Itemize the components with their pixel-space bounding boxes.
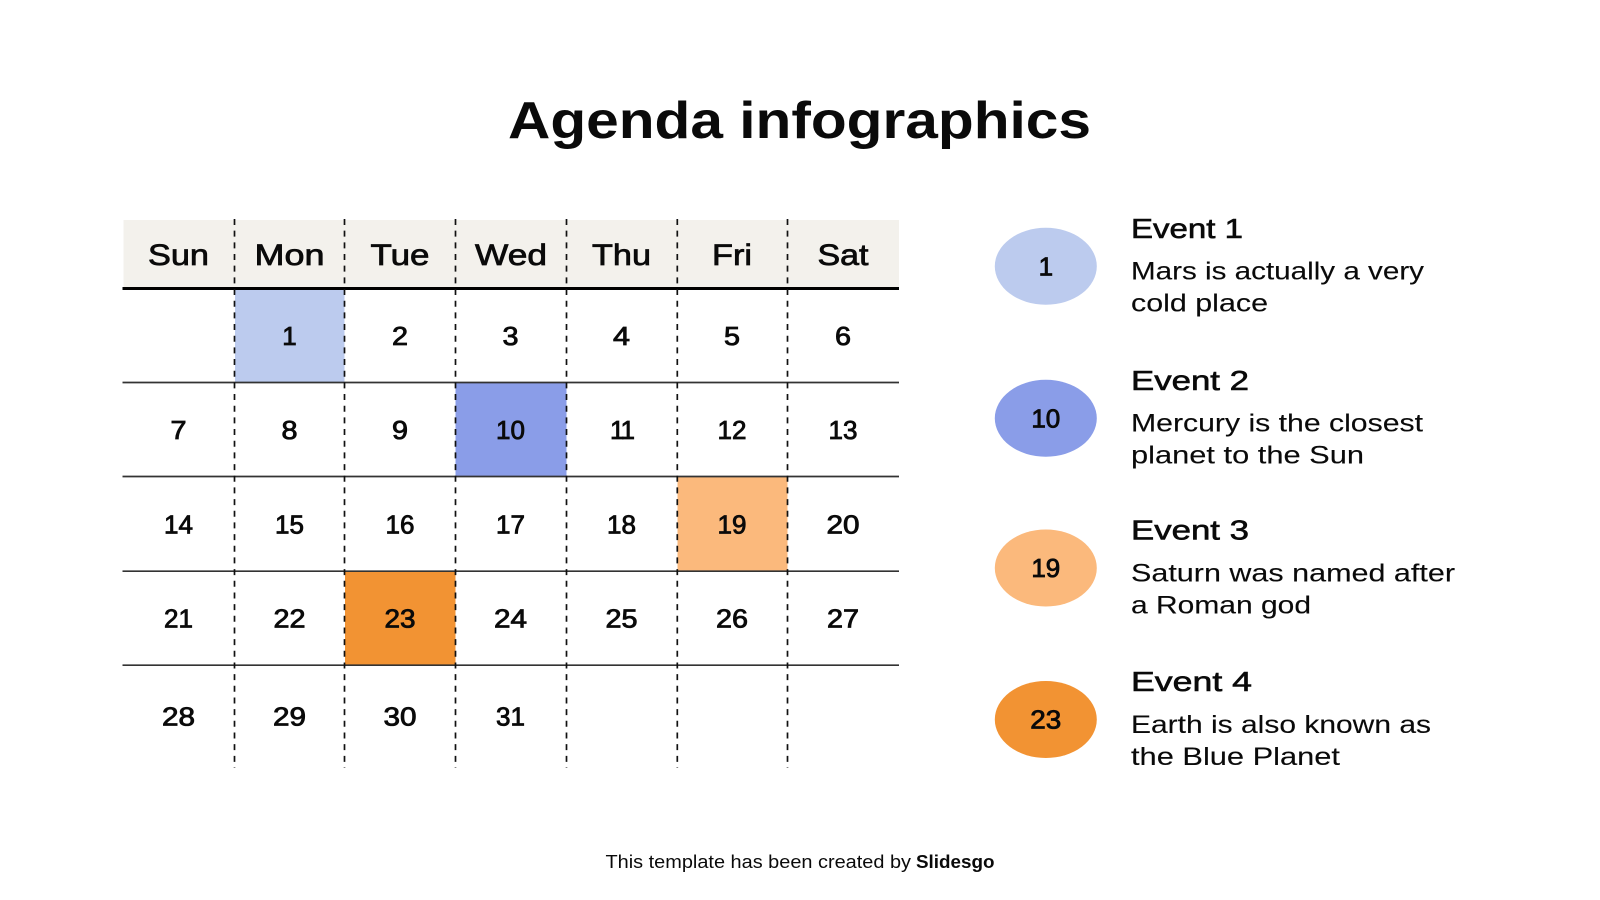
event 3 description bbox=[1131, 559, 1455, 619]
day numbers: 13 bbox=[829, 415, 857, 445]
panel: calendar bbox=[122, 219, 899, 768]
day numbers: 22 bbox=[274, 604, 306, 634]
badge: 1 bbox=[995, 228, 1097, 305]
badge: 23 bbox=[995, 681, 1097, 758]
day numbers: 30 bbox=[384, 702, 416, 732]
day numbers: 5 bbox=[724, 321, 740, 351]
event 2 description bbox=[1131, 410, 1423, 470]
day numbers: 3 bbox=[502, 321, 518, 351]
badge number 19: 19 bbox=[1031, 553, 1060, 583]
day numbers: 7 bbox=[170, 415, 186, 445]
event 1 description: Mars is actually a very bbox=[1131, 258, 1425, 286]
title: Agenda infographics bbox=[508, 92, 1091, 150]
weekday labels: Sun bbox=[148, 239, 209, 272]
event 2 heading: Event 2 bbox=[1131, 365, 1249, 396]
weekday labels: Sat bbox=[818, 239, 869, 272]
grid lines bbox=[122, 219, 899, 768]
weekday labels: Fri bbox=[712, 239, 752, 272]
badge: 10 bbox=[995, 380, 1097, 457]
day numbers: 18 bbox=[607, 510, 636, 540]
day numbers: 14 bbox=[164, 510, 193, 540]
event 3 description: Saturn was named after bbox=[1131, 559, 1455, 587]
event 4 description: Earth is also known as bbox=[1131, 711, 1431, 739]
event 2 description: planet to the Sun bbox=[1131, 442, 1364, 470]
weekday labels: Wed bbox=[475, 239, 547, 272]
event 1 bbox=[995, 213, 1425, 318]
highlighted day 23 bbox=[345, 572, 456, 665]
weekday header band bbox=[124, 220, 899, 288]
event 1 description bbox=[1131, 258, 1425, 318]
event 1 description: cold place bbox=[1131, 290, 1268, 318]
badge: 19 bbox=[995, 530, 1097, 606]
event 4 heading: Event 4 bbox=[1131, 666, 1252, 697]
day numbers: 4 bbox=[613, 321, 630, 351]
day numbers: 25 bbox=[606, 604, 638, 634]
day numbers: 21 bbox=[164, 604, 193, 634]
day numbers bbox=[162, 321, 860, 732]
day numbers: 16 bbox=[386, 510, 414, 540]
event 3 description: a Roman god bbox=[1131, 591, 1311, 619]
event 1 heading: Event 1 bbox=[1131, 213, 1243, 244]
day numbers: 31 bbox=[496, 702, 525, 732]
footer credit: Slidesgo bbox=[916, 851, 994, 872]
weekday labels: Mon bbox=[254, 239, 324, 272]
day numbers: 2 bbox=[392, 321, 408, 351]
badge number 10: 10 bbox=[1031, 404, 1060, 434]
day numbers: 20 bbox=[826, 510, 860, 540]
day numbers: 27 bbox=[827, 604, 859, 634]
badge number 23: 23 bbox=[1030, 704, 1061, 734]
day numbers: 8 bbox=[282, 415, 298, 445]
highlighted day 10 bbox=[456, 383, 566, 476]
day numbers: 29 bbox=[273, 702, 306, 732]
weekday labels bbox=[148, 239, 869, 272]
highlighted day 1 bbox=[235, 289, 344, 382]
day numbers: 1 bbox=[282, 321, 297, 351]
day numbers: 28 bbox=[162, 702, 195, 732]
weekday labels: Tue bbox=[370, 239, 430, 272]
event 3 heading: Event 3 bbox=[1131, 515, 1249, 546]
day numbers: 26 bbox=[716, 604, 748, 634]
day numbers: 12 bbox=[718, 415, 746, 445]
event 4 bbox=[995, 666, 1431, 771]
day numbers: 6 bbox=[835, 321, 851, 351]
footer credit: This template has been created by bbox=[606, 851, 912, 872]
weekday labels: Thu bbox=[592, 239, 651, 272]
day numbers: 11 bbox=[610, 415, 635, 445]
highlighted day 19 bbox=[678, 477, 788, 571]
day numbers: 19 bbox=[718, 510, 746, 540]
day numbers: 23 bbox=[384, 604, 416, 634]
day numbers: 15 bbox=[275, 510, 304, 540]
event 4 description: the Blue Planet bbox=[1131, 743, 1340, 771]
day numbers: 17 bbox=[496, 510, 525, 540]
day numbers: 10 bbox=[496, 415, 525, 445]
event 2 bbox=[995, 365, 1423, 470]
event 2 description: Mercury is the closest bbox=[1131, 410, 1423, 438]
day numbers: 9 bbox=[392, 415, 408, 445]
event 4 description bbox=[1131, 711, 1431, 771]
event 3 bbox=[995, 515, 1455, 619]
day numbers: 24 bbox=[494, 604, 527, 634]
badge number 1: 1 bbox=[1039, 252, 1053, 282]
